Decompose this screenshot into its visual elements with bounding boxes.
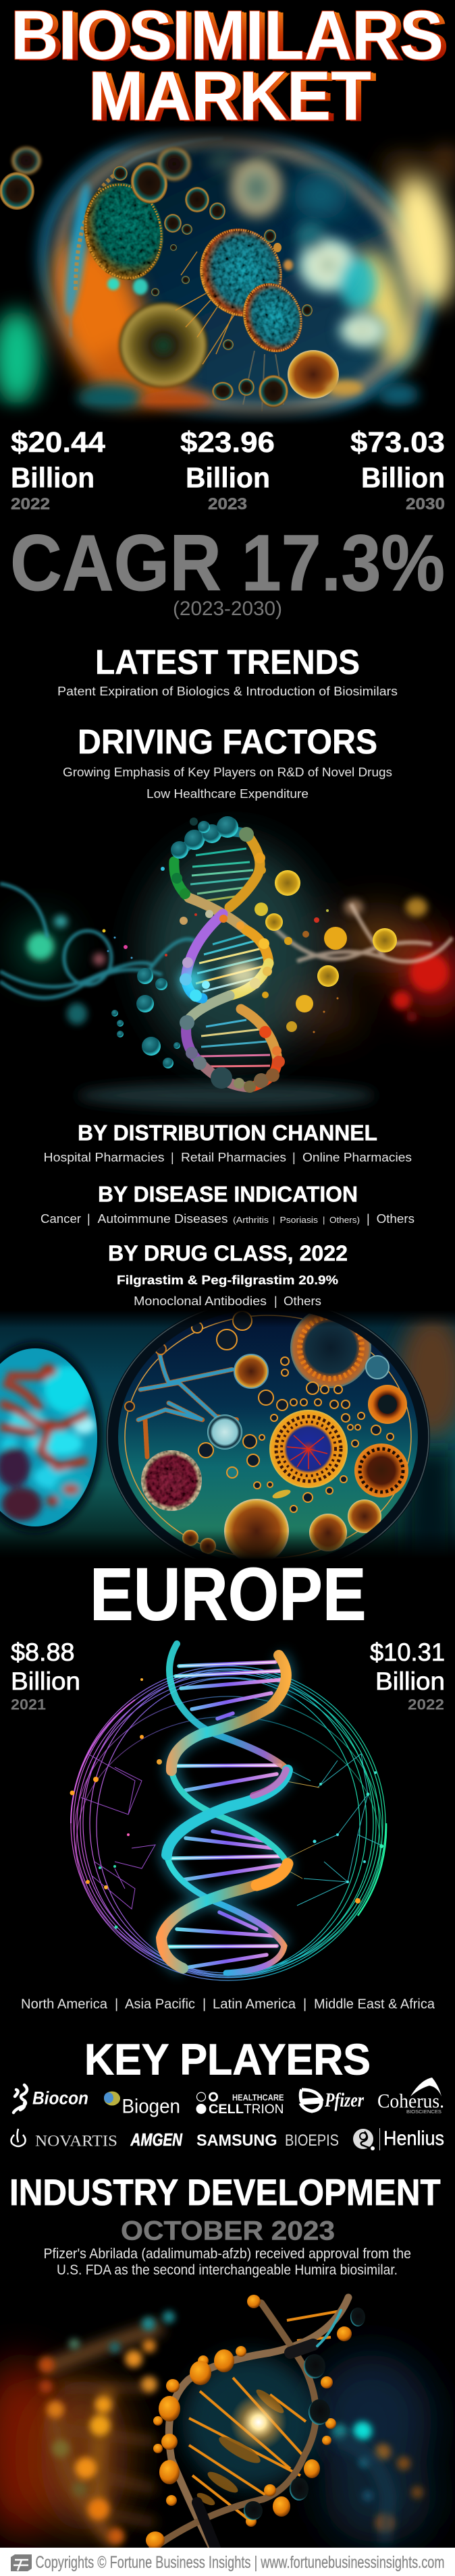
logo: biogen [104, 2091, 180, 2118]
section: by distribution channel: Retail Pharmacies [181, 1151, 286, 1164]
section: driving factors: Growing Emphasis of Key Players on R&D of Novel Drugs [63, 766, 392, 779]
network sphere [71, 1666, 385, 1980]
stat: 2022 market size: 2022 [11, 495, 50, 513]
section: by disease indication: (Arthritis [233, 1215, 269, 1225]
section: by distribution channel: Online Pharmacies [302, 1151, 412, 1164]
section: by disease indication: BY DISEASE INDICATION [98, 1182, 358, 1207]
stat: 2023 market size: 2023 [208, 495, 247, 513]
section: by disease indication: | [323, 1215, 325, 1225]
stat: europe 2021 [11, 1638, 80, 1713]
stat: europe 2021: $8.88 [11, 1638, 74, 1666]
filaments [176, 252, 235, 364]
bright centre [230, 2394, 287, 2451]
floating yellow beads [255, 870, 397, 1032]
stat: 2022 market size: $20.44 [11, 426, 105, 459]
rungs [190, 849, 270, 1066]
text: other regions: Latin America [213, 1997, 296, 2011]
stat: 2030 market size: 2030 [406, 495, 445, 513]
small ring cells [0, 146, 313, 350]
logo: biocon: Biocon [32, 2088, 88, 2109]
stat: europe 2022 [370, 1638, 445, 1713]
stat: 2023 market size: Billion [186, 461, 270, 493]
section: by disease indication: | [367, 1212, 370, 1226]
helix ribbons [161, 1644, 288, 1973]
section: by disease indication: Cancer [41, 1212, 81, 1226]
particles [103, 909, 339, 1033]
section: by disease indication: Psoriasis [279, 1215, 319, 1225]
strands [174, 831, 277, 1087]
section: by drug class [108, 1241, 348, 1308]
text: other regions: Middle East & Africa [314, 1997, 435, 2011]
development text: Pfizer's Abrilada (adalimumab-afzb) received approval from the [43, 2246, 411, 2262]
section: by distribution channel [43, 1121, 412, 1164]
bright cells [74, 174, 339, 399]
development text [43, 2246, 411, 2278]
cagr callout: (2023-2030) [173, 598, 282, 620]
logo: biogen: Biogen [122, 2096, 180, 2118]
stat: europe 2022: $10.31 [370, 1638, 445, 1666]
section: latest trends: LATEST TRENDS [95, 643, 360, 681]
section: by drug class: | [274, 1294, 277, 1308]
orange beads [146, 2295, 352, 2549]
section: driving factors [63, 722, 392, 801]
section: driving factors: Low Healthcare Expenditure [146, 787, 309, 801]
inner glow [182, 2354, 317, 2489]
section: by disease indication: Autoimmune Diseases [97, 1212, 228, 1226]
dark beads [244, 2308, 365, 2520]
left ribbons [0, 884, 196, 998]
backbone [151, 2297, 348, 2553]
section: by disease indication: Others) [329, 1215, 360, 1225]
stat: 2030 market size: Billion [361, 461, 445, 493]
logo: coherus biosciences [377, 2078, 444, 2115]
logo: celltrion healthcare: HEALTHCARE [232, 2093, 284, 2102]
stat: 2030 market size: $73.03 [350, 426, 445, 459]
title: biosimilars market: MARKET [88, 57, 371, 135]
heading: europe: EUROPE [90, 1553, 366, 1636]
logo: pfizer [300, 2089, 364, 2111]
logo: coherus biosciences: Coherus. [377, 2090, 444, 2113]
logo: biocon [14, 2085, 88, 2113]
stat: 2023 market size: $23.96 [180, 426, 275, 459]
blurred background helix left [47, 2327, 162, 2543]
text: other regions: North America [21, 1997, 108, 2011]
development date: OCTOBER 2023 [121, 2216, 335, 2246]
section: by disease indication: Others [377, 1212, 414, 1226]
logo: celltrion healthcare: TRION [244, 2102, 284, 2117]
main dish [106, 1317, 430, 1545]
blue branching colony [138, 1339, 238, 1457]
fade [0, 1310, 455, 1327]
section: by disease indication [41, 1182, 414, 1226]
section: by drug class: Monoclonal Antibodies [134, 1294, 267, 1308]
logo: samsung bioepis: SAMSUNG [196, 2131, 277, 2150]
logo: coherus biosciences: BIOSCIENCES [406, 2110, 441, 2115]
rungs [189, 2310, 344, 2519]
section: by disease indication: | [87, 1212, 90, 1226]
strand beads [171, 816, 285, 1093]
section: by distribution channel: | [292, 1151, 296, 1164]
text: other regions: | [115, 1997, 118, 2011]
text: other regions [21, 1997, 435, 2011]
section: driving factors: DRIVING FACTORS [78, 722, 377, 761]
stat: europe 2021: 2021 [11, 1696, 46, 1713]
logo: novartis [11, 2129, 117, 2150]
image: colourful dna helix [0, 816, 455, 1108]
stat: europe 2021: Billion [11, 1667, 80, 1695]
helix rungs [169, 1662, 284, 1968]
logo: samsung bioepis [196, 2131, 339, 2150]
stat: 2022 market size [11, 426, 105, 513]
development text: U.S. FDA as the second interchangeable Humira biosimilar. [57, 2262, 398, 2278]
stat: europe 2022: 2022 [408, 1696, 444, 1713]
nodes [70, 1678, 383, 1929]
logo: pfizer: Pfizer [324, 2089, 364, 2111]
section: by distribution channel: | [171, 1151, 174, 1164]
blurred left lens [0, 1342, 103, 1533]
section: latest trends [57, 643, 398, 698]
image: neon dna in network sphere [70, 1644, 386, 1980]
stat: 2023 market size [180, 426, 275, 513]
stat: 2022 market size: Billion [11, 461, 95, 493]
section: by distribution channel: BY DISTRIBUTION CHANNEL [78, 1121, 377, 1145]
title: biosimilars market: MARKET [88, 57, 371, 135]
footer bar [0, 2548, 455, 2576]
logo: celltrion healthcare [196, 2092, 284, 2117]
footer logo [11, 2554, 32, 2571]
text: other regions: | [303, 1997, 306, 2011]
section: latest trends: Patent Expiration of Biologics & Introduction of Biosimilars [57, 685, 398, 698]
small rings [192, 1311, 394, 1512]
text: other regions: Asia Pacific [125, 1997, 195, 2011]
logo: henlius [353, 2127, 444, 2150]
section: by disease indication: | [273, 1215, 275, 1225]
title: biosimilars market [11, 0, 444, 135]
image: microscope cells hero [0, 127, 455, 423]
section: by distribution channel: Hospital Pharmacies [43, 1151, 165, 1164]
stat: 2030 market size [350, 426, 445, 513]
section: by drug class: BY DRUG CLASS, 2022 [108, 1241, 348, 1265]
logo: henlius: Henlius [383, 2127, 444, 2150]
logo: novartis: NOVARTIS [35, 2133, 117, 2150]
floating teal beads [111, 867, 188, 1068]
lower cells at the lens edge [78, 375, 419, 413]
cultures [141, 1307, 408, 1564]
section: by drug class: Others [284, 1294, 321, 1308]
image: orange dna helix [0, 2295, 432, 2553]
text: other regions: | [203, 1997, 206, 2011]
right ribbons [270, 904, 452, 962]
logo: amgen: AMGEN [130, 2129, 183, 2150]
image: petri dish with cultures [0, 1298, 455, 1575]
stat: europe 2022: Billion [375, 1667, 445, 1695]
section: by drug class: Filgrastim & Peg-filgrastim 20.9% [117, 1273, 338, 1287]
helix glow [161, 1655, 288, 1968]
logo: samsung bioepis: BIOEPIS [285, 2131, 339, 2150]
logo: celltrion healthcare: CELL [209, 2102, 244, 2117]
heading: key players: KEY PLAYERS [84, 2034, 371, 2084]
